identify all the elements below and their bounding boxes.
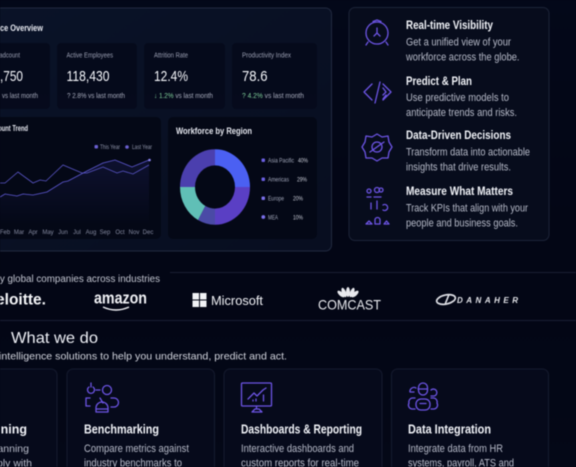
benefit: measure what matters: Track KPIs that align with your xyxy=(406,202,528,214)
chart legend xyxy=(94,145,152,151)
benefit: data-driven decisions xyxy=(406,130,530,174)
chart panel: workforce by region: Workforce by Region xyxy=(176,126,252,136)
icon: compass badge xyxy=(362,134,392,161)
chart x axis months: Jul xyxy=(73,230,81,236)
KPI card: productivity index xyxy=(232,43,317,109)
donut legend: 29% xyxy=(297,176,307,184)
donut legend: Asia Pacific xyxy=(268,158,295,164)
KPI card: active employees: 118,430 xyxy=(66,68,110,85)
chart legend: This Year xyxy=(100,145,120,151)
icon: clock xyxy=(366,20,388,45)
benefit: predict and plan: Predict & Plan xyxy=(406,76,472,88)
benefit: real-time visibility: Get a unified view of your xyxy=(406,36,511,48)
donut legend: 20% xyxy=(293,196,303,202)
service card: dashboards and reporting: Dashboards & Reporting xyxy=(241,422,362,436)
benefit: real-time visibility xyxy=(405,20,520,64)
section subtitle: intelligence solutions to help you understand, predict and act. xyxy=(0,352,287,362)
donut legend: 40% xyxy=(298,158,308,164)
icon: monitor with chart xyxy=(242,383,272,412)
KPI card: headcount: ,750 xyxy=(0,68,23,85)
panel: benefits list xyxy=(349,8,549,240)
benefit: predict and plan xyxy=(406,76,517,119)
service card: benchmarking: Benchmarking xyxy=(84,422,159,436)
chart panel: workforce by region xyxy=(168,117,317,239)
service card: data integration: Integrate data from HR xyxy=(408,443,503,455)
benefit: real-time visibility: workforce across the globe. xyxy=(405,52,520,64)
KPI card: attrition rate: ↓ 1.2% vs last month xyxy=(154,93,213,100)
benefit: measure what matters: Measure What Matters xyxy=(406,186,513,198)
icon: people comparison xyxy=(86,383,118,412)
panel: workforce overview dashboard xyxy=(0,8,332,251)
chart x axis months: May xyxy=(42,230,54,236)
KPI card: productivity index: Productivity Index xyxy=(242,52,291,60)
KPI card: active employees: ? 2.8% vs last month xyxy=(67,93,125,100)
benefit: data-driven decisions: Transform data into actionable xyxy=(406,146,530,158)
logo: Danaher: DANAHER xyxy=(457,296,518,305)
icon: measure people xyxy=(366,188,389,224)
icon: connected people xyxy=(408,383,438,410)
KPI card: headcount: vs last month xyxy=(2,93,38,100)
logo: Amazon: amazon xyxy=(94,290,147,308)
donut legend: Europe xyxy=(268,196,284,202)
benefit: data-driven decisions: insights that drive results. xyxy=(406,162,511,174)
chart x axis months xyxy=(0,230,153,236)
service card: dashboards and reporting: Interactive dashboards and xyxy=(241,443,354,455)
heading: what we do: What we do xyxy=(11,330,98,347)
chart x axis months: Oct xyxy=(115,230,125,236)
service card: data integration: Data Integration xyxy=(408,422,491,436)
benefit: data-driven decisions: Data-Driven Decisions xyxy=(406,130,511,142)
logo: Microsoft: Microsoft xyxy=(211,293,263,308)
benefit: measure what matters: people and business goals. xyxy=(406,218,518,230)
benefit: real-time visibility: Real-time Visibility xyxy=(406,20,494,32)
service card: dashboards and reporting xyxy=(224,369,382,467)
chart panel: headcount trend xyxy=(0,117,161,239)
donut legend: 10% xyxy=(293,214,303,222)
service card: benchmarking: Compare metrics against xyxy=(84,443,189,455)
donut chart xyxy=(180,149,250,225)
service card: data integration xyxy=(392,369,548,467)
logo: Danaher xyxy=(436,293,518,306)
benefit: predict and plan: anticipate trends and risks. xyxy=(406,107,517,119)
icon: code brackets xyxy=(364,82,391,103)
chart x axis months: Aug xyxy=(86,230,96,236)
KPI card: productivity index: 78.6 xyxy=(242,68,268,85)
chart x axis months: Apr xyxy=(28,230,38,236)
KPI card: headcount xyxy=(0,43,50,109)
logo: Comcast: COMCAST xyxy=(318,296,381,312)
chart legend: Last Year xyxy=(132,145,152,151)
chart x axis months: Sep xyxy=(100,230,111,236)
logo: Comcast xyxy=(318,287,381,312)
KPI card: attrition rate: 12.4% xyxy=(154,68,188,85)
logo strip xyxy=(0,287,518,312)
KPI card: active employees: Active Employees xyxy=(66,52,113,60)
service card: benchmarking xyxy=(67,369,214,467)
benefit: measure what matters xyxy=(406,186,528,230)
donut legend: Americas xyxy=(268,176,290,184)
chart x axis months: Nov xyxy=(129,230,139,236)
service card: partially cropped planning card xyxy=(0,369,57,467)
KPI card: attrition rate: Attrition Rate xyxy=(154,52,188,60)
chart x axis months: Jun xyxy=(58,230,68,236)
chart x axis months: Feb xyxy=(0,230,11,236)
KPI card: attrition rate xyxy=(144,43,225,109)
chart x axis months: Mar xyxy=(14,230,24,236)
KPI card: active employees xyxy=(57,43,137,109)
line chart xyxy=(0,159,151,225)
donut legend: MEA xyxy=(268,214,278,222)
KPI card: productivity index: ? 4.2% vs last month xyxy=(242,93,304,100)
benefit: predict and plan: Use predictive models to xyxy=(406,92,509,104)
chart x axis months: Dec xyxy=(143,230,153,236)
donut legend xyxy=(261,158,308,222)
